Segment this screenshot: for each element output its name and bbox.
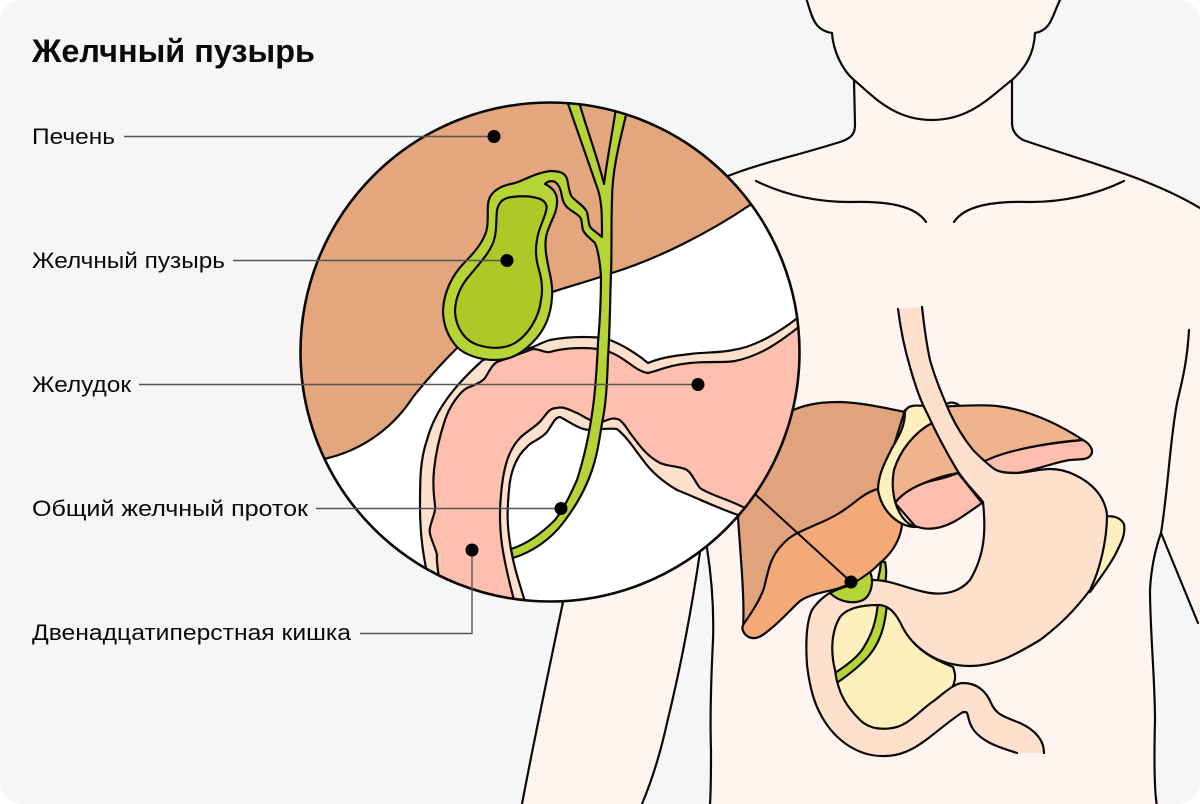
- gallbladder and bile ducts: [443, 98, 627, 558]
- label: stomach: Желудок: [32, 372, 131, 397]
- right yellow gland: [1090, 516, 1124, 592]
- yellow ring: [878, 406, 932, 527]
- upper pink lobe: [983, 440, 1092, 473]
- label: common bile duct: [33, 499, 568, 520]
- right liver lobe: [880, 405, 1083, 503]
- body silhouette: [522, 0, 1200, 804]
- liver back lobe: [738, 402, 905, 627]
- pancreas head: [833, 606, 956, 728]
- small yellow gland tip: [946, 402, 960, 406]
- duct lower section: [836, 606, 888, 683]
- lower pink lobe: [895, 473, 982, 529]
- liver section: [302, 104, 751, 460]
- label: stomach: [32, 376, 704, 396]
- title: Желчный пузырь: [31, 33, 315, 69]
- small gallbladder: [830, 572, 872, 602]
- gallbladder interior: [455, 196, 547, 348]
- organs: full abdominal view: [738, 307, 1124, 756]
- label: duodenum: Двенадцатиперстная кишка: [32, 620, 352, 645]
- label: duodenum: [32, 544, 478, 645]
- label: gallbladder: Желчный пузырь: [32, 248, 225, 273]
- label: liver: Печень: [32, 124, 115, 149]
- stomach and duodenum outline: [806, 309, 1017, 756]
- leader line to small gallbladder: [756, 495, 858, 588]
- stomach and duodenum fill: [806, 307, 1107, 756]
- magnified circle: [299, 101, 801, 603]
- stomach interior: [428, 327, 798, 598]
- label: liver: [34, 128, 500, 144]
- stomach wall: [418, 318, 797, 599]
- label: gallbladder: [32, 252, 514, 272]
- liver front lobe: [742, 489, 902, 638]
- label: common bile duct: Общий желчный проток: [32, 496, 308, 521]
- duct above the stomach: [877, 562, 886, 586]
